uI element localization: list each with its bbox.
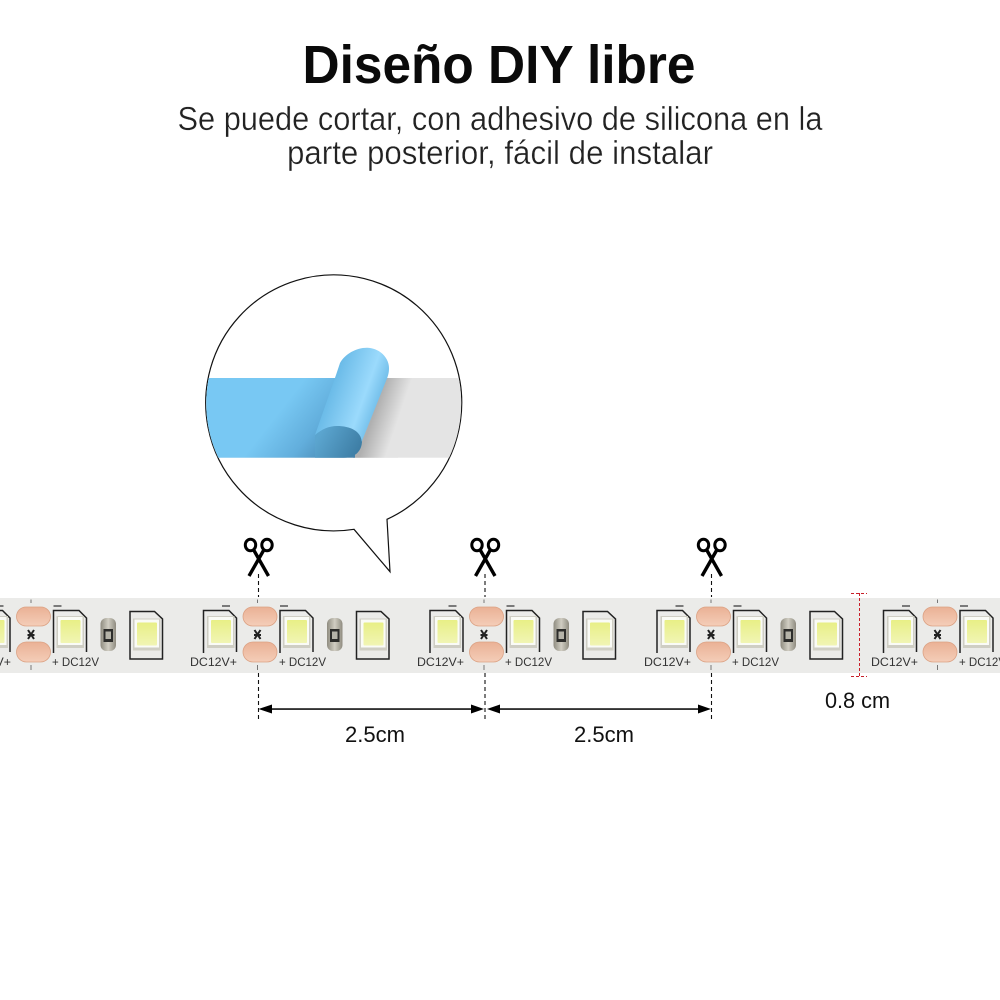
icon: scissors 3 <box>698 539 725 576</box>
arrow: first 2.5cm <box>258 704 484 714</box>
strip labels: DC12V+ <box>644 655 691 669</box>
icon: scissors 2 <box>472 539 499 576</box>
strip labels: + DC12V <box>279 655 326 669</box>
callout: adhesive backing bubble <box>205 275 463 572</box>
strip labels: + DC12V <box>505 655 552 669</box>
arrow: second 2.5cm <box>487 704 711 714</box>
strip labels: DC12V+ <box>417 655 464 669</box>
subtitle: Se puede cortar, con adhesivo de silicona en la <box>178 100 823 137</box>
width dimension marker <box>851 593 867 676</box>
label: first 2.5cm: 2.5cm <box>345 722 405 747</box>
strip labels: + DC12V <box>732 655 779 669</box>
cut lines <box>258 574 712 722</box>
label: 0.8 cm: 0.8 cm <box>825 688 890 713</box>
strip labels <box>0 655 1000 669</box>
strip labels: DC12V+ <box>190 655 237 669</box>
LED strip <box>0 598 1000 673</box>
label: second 2.5cm: 2.5cm <box>574 722 634 747</box>
subtitle: parte posterior, fácil de instalar <box>287 134 713 171</box>
icon: scissors 1 <box>245 539 272 576</box>
strip labels: + DC12V <box>52 655 99 669</box>
peeled adhesive illustration <box>205 348 463 458</box>
title: Diseño DIY libre <box>302 35 696 95</box>
strip modules <box>0 600 1000 670</box>
subtitle <box>178 100 823 171</box>
strip labels: DC12V+ <box>871 655 918 669</box>
